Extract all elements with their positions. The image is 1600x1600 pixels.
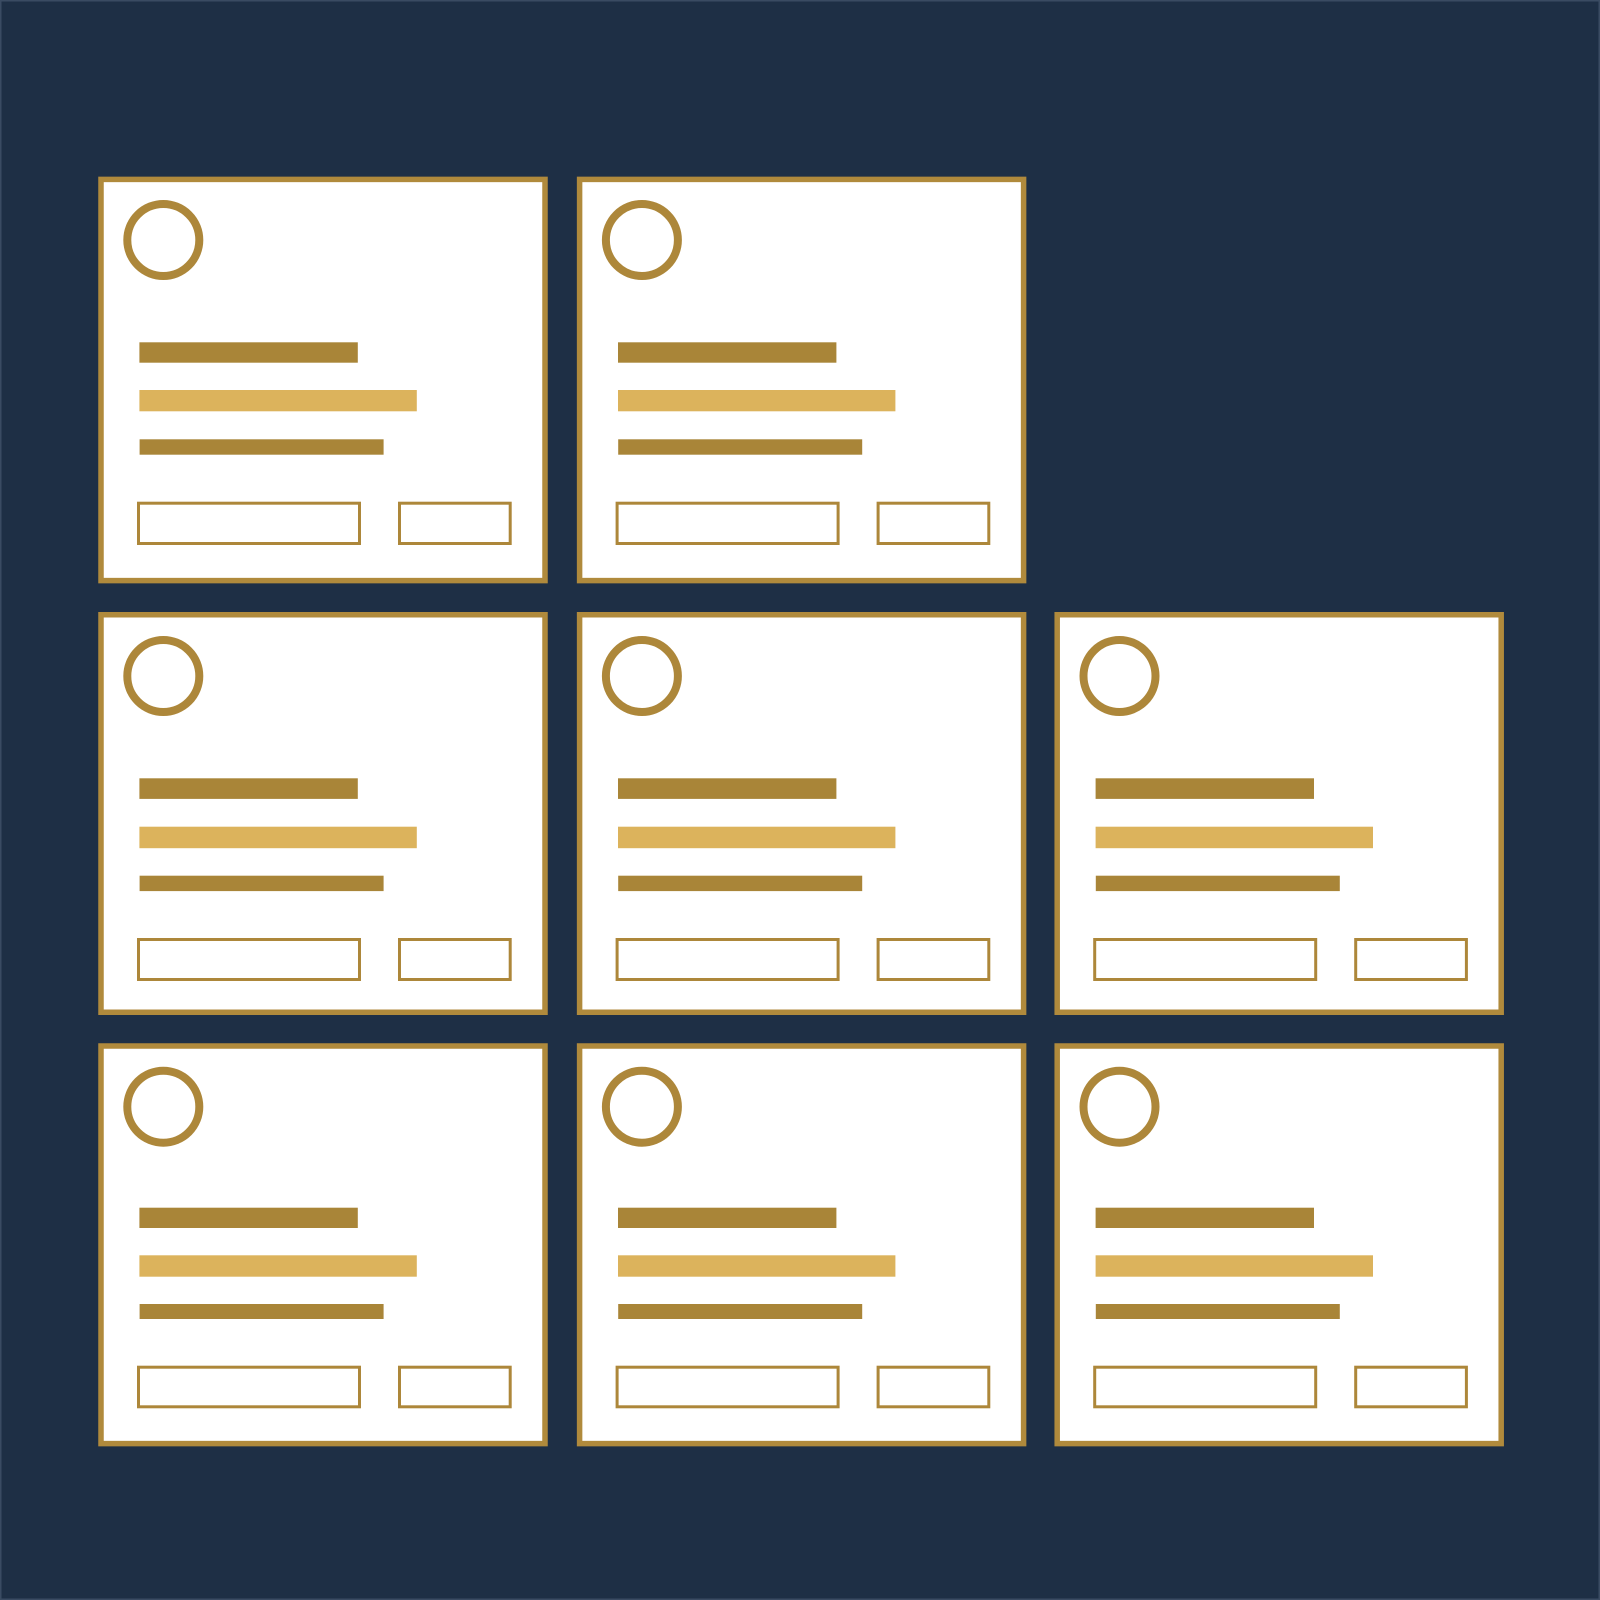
panel: card row 1 column 1 xyxy=(101,179,545,581)
card frame xyxy=(101,179,545,581)
text bar xyxy=(618,876,862,891)
wide button outline xyxy=(138,940,360,980)
small button outline xyxy=(878,940,989,980)
icon: circle outline xyxy=(606,204,678,276)
wide button outline xyxy=(138,503,360,544)
card frame xyxy=(101,1046,545,1444)
icon: circle outline xyxy=(606,640,678,712)
panel: card row 2 column 2 xyxy=(580,615,1024,1012)
highlight bar xyxy=(139,827,417,848)
highlight bar xyxy=(139,1255,417,1277)
text bar xyxy=(1096,1304,1340,1319)
small button outline xyxy=(400,1367,510,1407)
card frame xyxy=(1057,615,1501,1012)
highlight bar xyxy=(618,1255,895,1277)
highlight bar xyxy=(1096,827,1373,848)
text bar xyxy=(140,876,384,891)
small button outline xyxy=(878,503,989,544)
small button outline xyxy=(1356,940,1466,980)
highlight bar xyxy=(1096,1255,1373,1277)
text bar xyxy=(1096,876,1340,891)
icon: circle outline xyxy=(1084,640,1156,712)
card frame xyxy=(580,615,1024,1012)
wide button outline xyxy=(1095,940,1316,980)
heading bar xyxy=(618,1208,836,1228)
wide button outline xyxy=(1095,1367,1316,1407)
wide button outline xyxy=(617,940,838,980)
card frame xyxy=(101,615,545,1012)
highlight bar xyxy=(139,390,417,411)
text bar xyxy=(140,439,384,455)
small button outline xyxy=(400,503,510,544)
text bar xyxy=(140,1304,384,1319)
panel: card row 3 column 3 xyxy=(1057,1046,1501,1444)
highlight bar xyxy=(618,390,895,411)
panel: card row 2 column 1 xyxy=(101,615,545,1012)
icon: circle outline xyxy=(127,1071,199,1143)
highlight bar xyxy=(618,827,895,848)
panel: card row 3 column 2 xyxy=(580,1046,1024,1444)
icon: circle outline xyxy=(1084,1071,1156,1143)
panel: card row 3 column 1 xyxy=(101,1046,545,1444)
icon: circle outline xyxy=(127,204,199,276)
heading bar xyxy=(139,1208,358,1228)
card frame xyxy=(1057,1046,1501,1444)
heading bar xyxy=(1096,1208,1314,1228)
small button outline xyxy=(400,940,510,980)
heading bar xyxy=(139,342,358,363)
wide button outline xyxy=(138,1367,360,1407)
icon: circle outline xyxy=(606,1071,678,1143)
text bar xyxy=(618,439,862,455)
text bar xyxy=(618,1304,862,1319)
panel: card row 1 column 2 xyxy=(580,179,1024,581)
card frame xyxy=(580,179,1024,581)
heading bar xyxy=(618,778,836,799)
card frame xyxy=(580,1046,1024,1444)
panel: card row 2 column 3 xyxy=(1057,615,1501,1012)
wide button outline xyxy=(617,1367,838,1407)
heading bar xyxy=(139,778,358,799)
heading bar xyxy=(618,342,836,363)
small button outline xyxy=(1356,1367,1466,1407)
icon: circle outline xyxy=(127,640,199,712)
small button outline xyxy=(878,1367,989,1407)
wide button outline xyxy=(617,503,838,544)
heading bar xyxy=(1096,778,1314,799)
